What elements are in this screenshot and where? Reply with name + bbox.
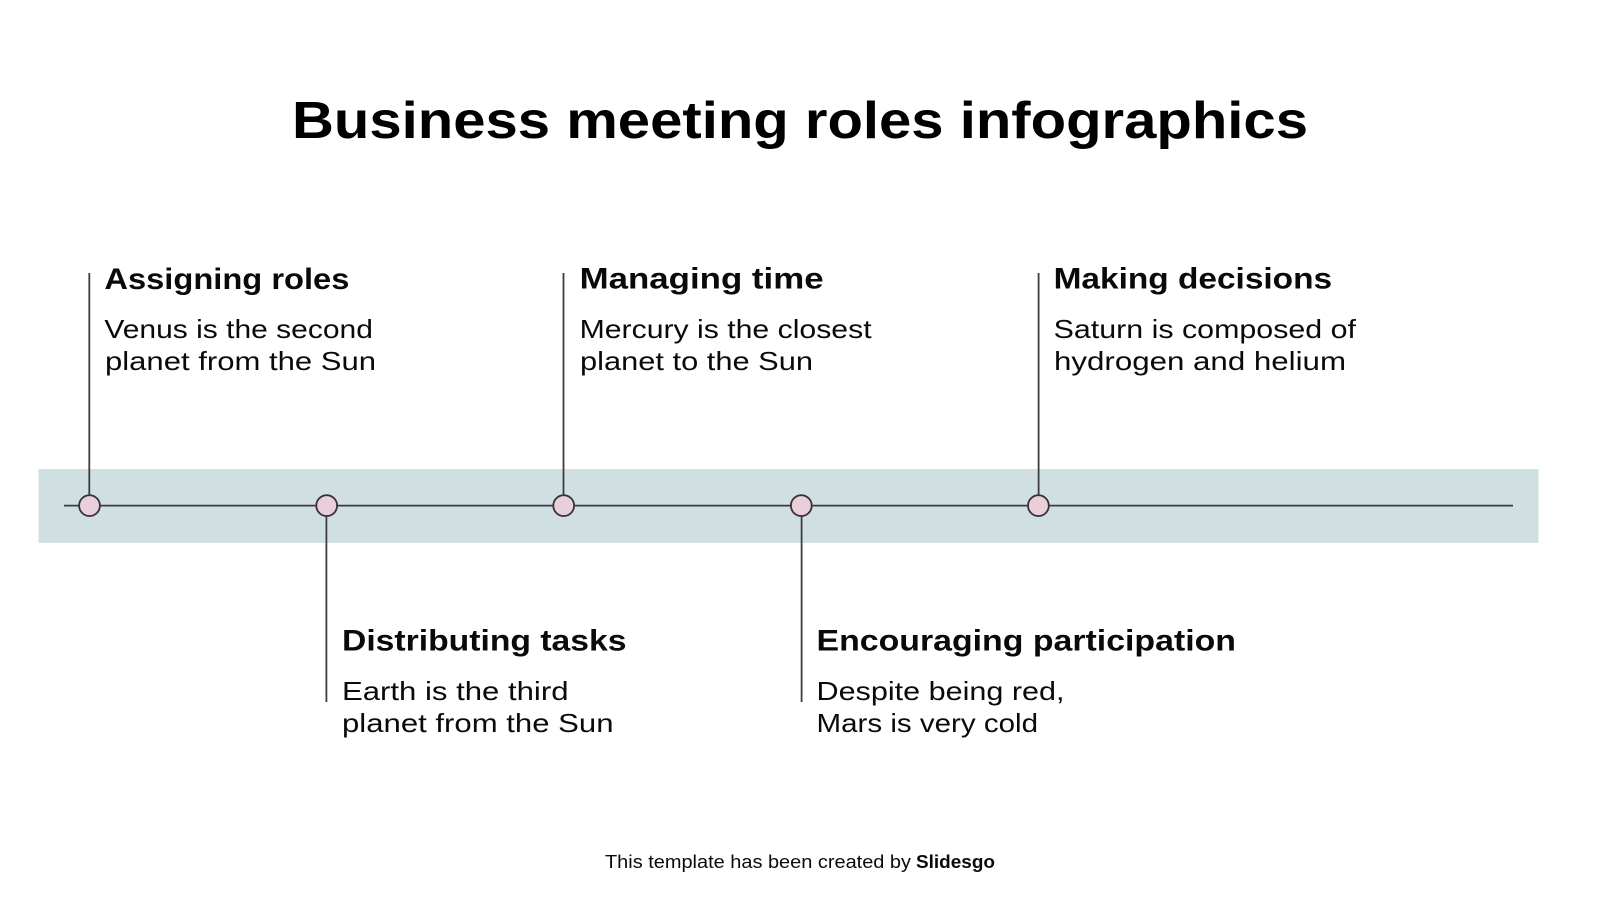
marker <box>316 495 337 516</box>
description: Saturn is composed of <box>1054 314 1357 344</box>
item: making decisions <box>1028 263 1357 516</box>
item: encouraging participation <box>791 495 1236 738</box>
item: assigning roles <box>79 263 376 516</box>
heading: Assigning roles <box>104 263 349 296</box>
heading: Distributing tasks <box>342 625 626 658</box>
connector line <box>1038 273 1040 505</box>
marker <box>79 495 100 516</box>
description <box>580 314 873 376</box>
connector line <box>88 273 90 505</box>
description <box>816 676 1064 738</box>
description: hydrogen and helium <box>1054 346 1346 376</box>
title: Business meeting roles infographics <box>292 92 1308 150</box>
description: Earth is the third <box>342 676 568 706</box>
description: planet from the Sun <box>342 708 614 738</box>
description: planet to the Sun <box>580 346 813 376</box>
item: managing time <box>553 263 873 516</box>
marker <box>791 495 812 516</box>
connector line <box>325 506 327 702</box>
description: planet from the Sun <box>105 346 376 376</box>
footer credit: This template has been created by <box>605 851 912 872</box>
connector line <box>562 273 564 505</box>
footer credit: Slidesgo <box>916 851 995 872</box>
description <box>1054 314 1357 376</box>
description <box>104 314 376 376</box>
description: Mercury is the closest <box>580 314 873 344</box>
timeline band <box>38 469 1538 543</box>
heading: Managing time <box>580 263 824 296</box>
heading: Making decisions <box>1054 263 1332 296</box>
marker <box>553 495 574 516</box>
marker <box>1028 495 1049 516</box>
description: Mars is very cold <box>816 708 1038 738</box>
item: distributing tasks <box>316 495 626 738</box>
connector line <box>801 506 803 702</box>
timeline axis line <box>64 505 1513 507</box>
heading: Encouraging participation <box>816 625 1236 658</box>
description <box>342 676 614 738</box>
description: Despite being red, <box>816 676 1064 706</box>
description: Venus is the second <box>104 314 373 344</box>
